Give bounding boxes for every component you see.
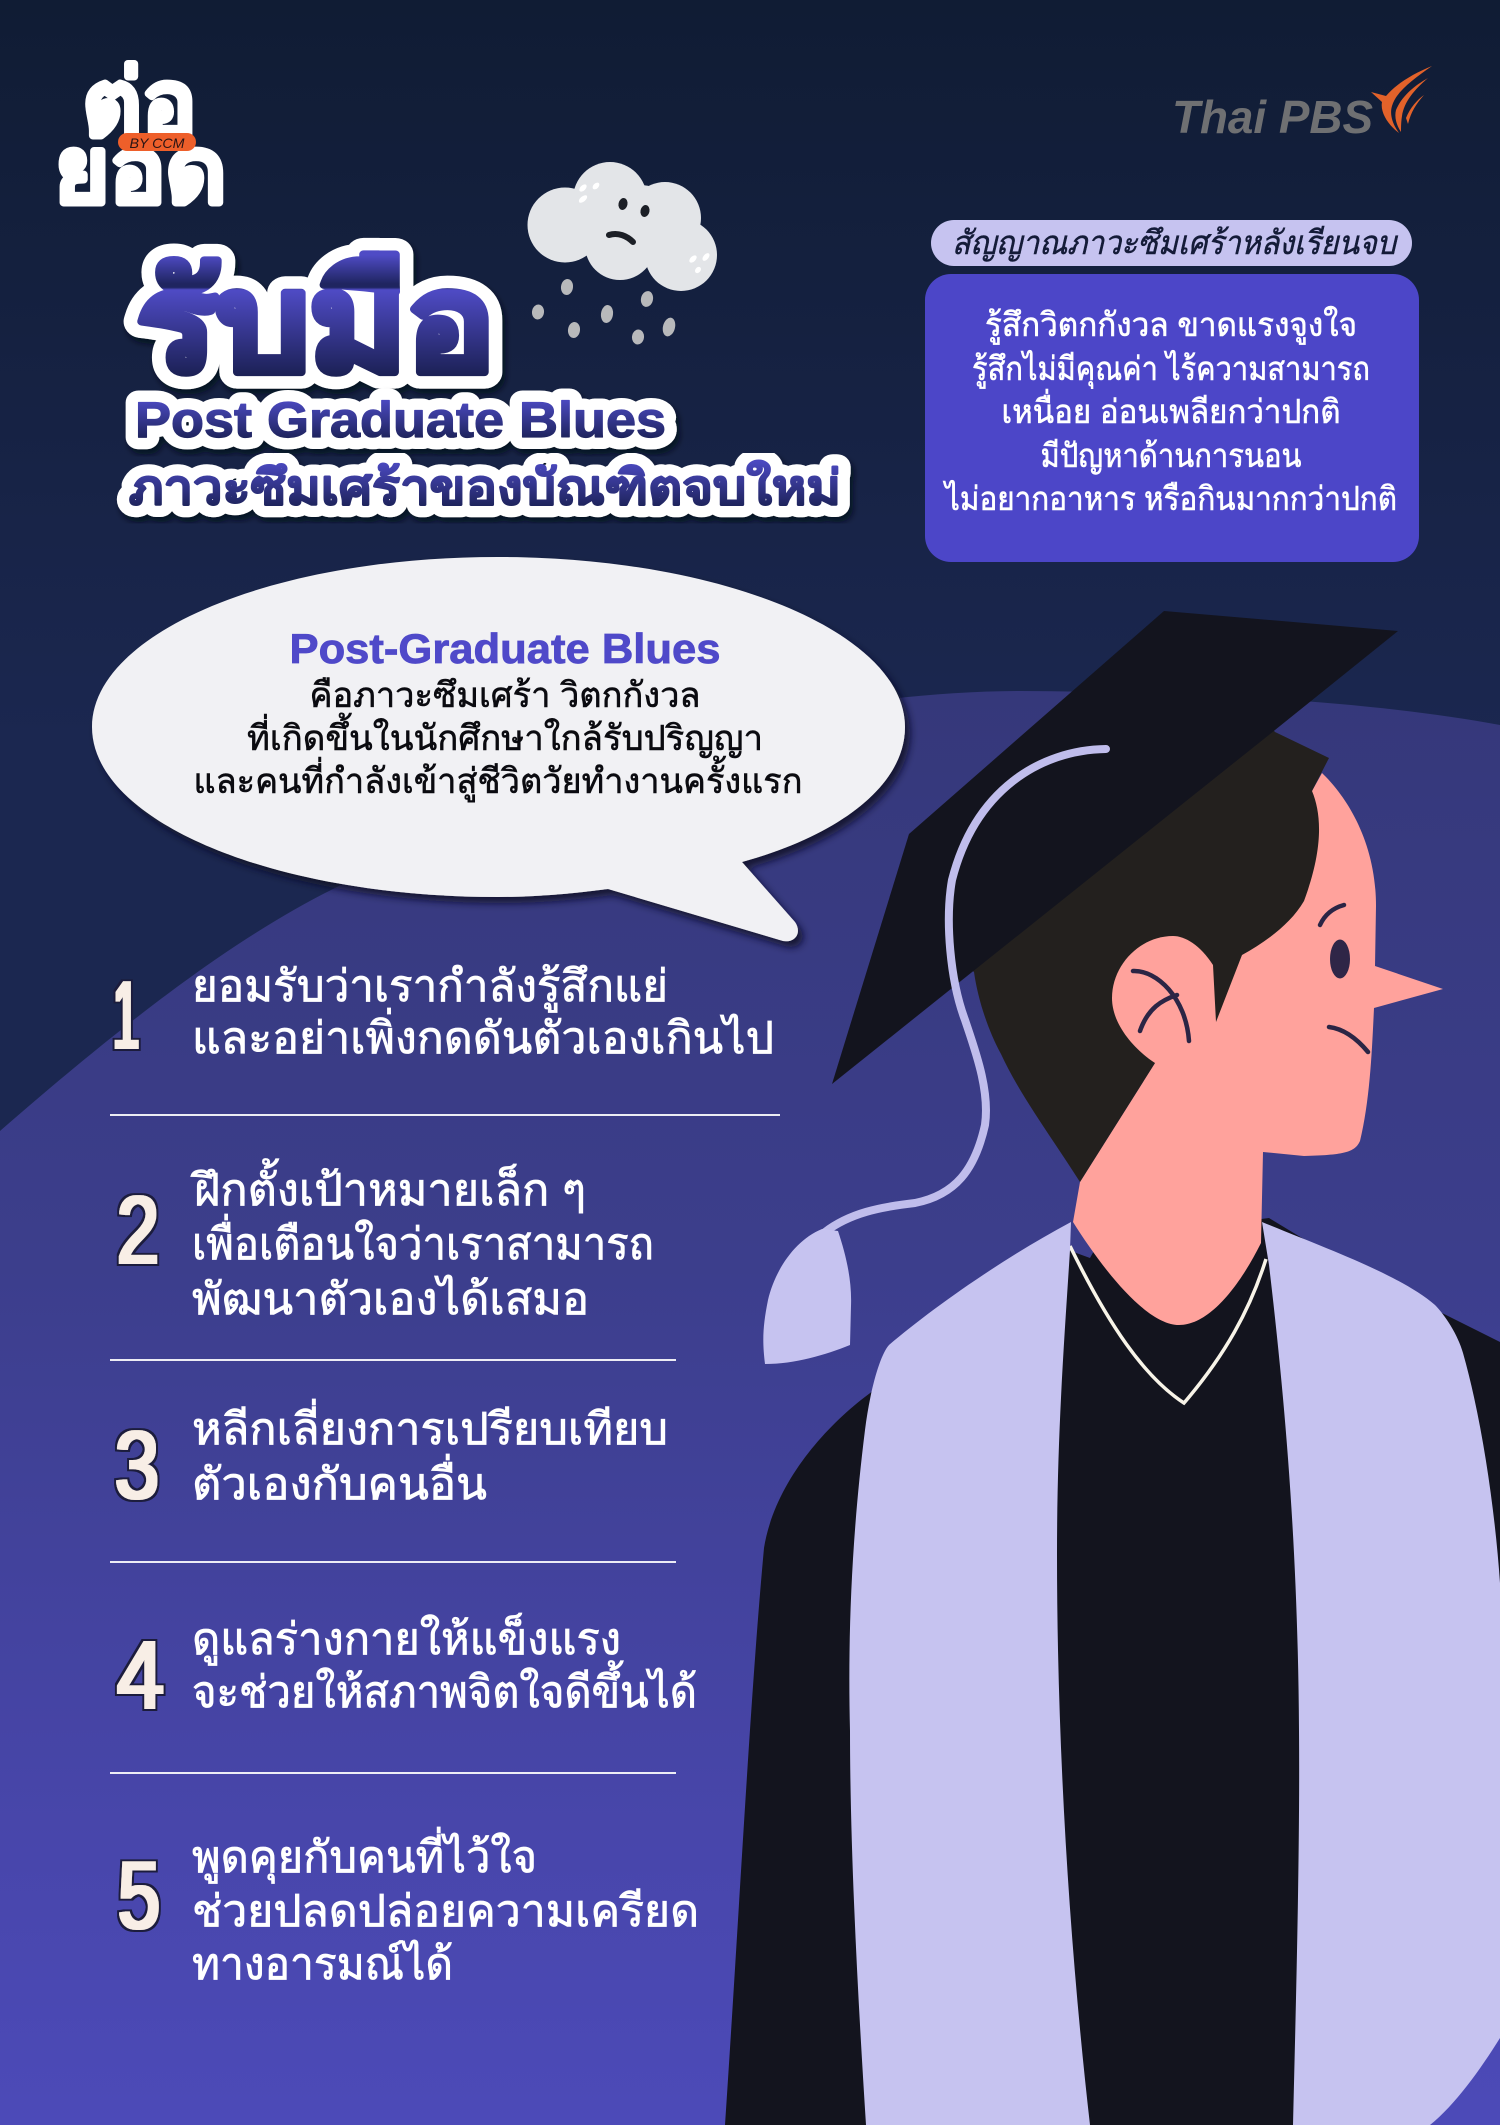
bubble text: คือภาวะซึมเศร้า วิตกกังวล [310, 676, 700, 715]
tip 4 [117, 1613, 697, 1729]
tip 4: 4 [117, 1622, 164, 1729]
tip 3 [115, 1398, 668, 1519]
graduation cap [832, 611, 1398, 1084]
subtitle outline: Thai: ภาวะซึมเศร้าของบัณฑิตจบใหม่ [129, 459, 841, 515]
panel: symptoms list: มีปัญหาด้านการนอน [1040, 437, 1302, 474]
illustration: graduate [725, 611, 1500, 2125]
tip 5: 5 [118, 1842, 160, 1949]
tip 2: เพื่อเตือนใจว่าเราสามารถ [192, 1213, 654, 1269]
tip 3: 3 [115, 1412, 159, 1519]
brow, eye and mouth [1320, 905, 1368, 1052]
title block [129, 248, 841, 515]
title outline: รับมือ: รับมือ [137, 248, 495, 399]
panel: symptoms list: ไม่อยากอาหาร หรือกินมากกว่าปกติ [942, 480, 1397, 517]
bubble text: ที่เกิดขึ้นในนักศึกษาใกล้รับปริญญา [247, 712, 763, 758]
title outline: Post Graduate Blues: Post Graduate Blues [135, 392, 666, 448]
background arc shape [0, 691, 1500, 2125]
tip 3: ตัวเองกับคนอื่น [192, 1453, 487, 1509]
tip 5 [118, 1826, 699, 1989]
panel: symptoms list: เหนื่อย อ่อนเพลียกว่าปกติ [1002, 389, 1340, 430]
tip 4: ดูแลร่างกายให้แข็งแรง [192, 1613, 621, 1666]
logo: ต่อยอด by CCM: ต่อ [82, 53, 196, 155]
panel: symptoms list: รู้สึกวิตกกังวล ขาดแรงจูงใจ [985, 306, 1357, 345]
left stole [849, 1222, 1090, 2125]
speech bubble: definition [92, 557, 905, 941]
face and neck [1073, 773, 1443, 1325]
ear lines [1133, 971, 1189, 1041]
tassel cord [825, 749, 1106, 1232]
panel: symptoms list: รู้สึกไม่มีคุณค่า ไร้ความสามารถ [972, 350, 1370, 389]
tip 2: ฝึกตั้งเป้าหมายเล็ก ๆ [190, 1158, 586, 1215]
icon: sad rain cloud [528, 162, 717, 345]
panel: symptoms heading pill: สัญญาณภาวะซึมเศร้าหลังเรียนจบ [952, 224, 1399, 262]
tip 1: ยอมรับว่าเรากำลังรู้สึกแย่ [192, 962, 668, 1013]
tip 2: 2 [117, 1177, 159, 1284]
logo: ต่อยอด by CCM: BY CCM [130, 135, 185, 151]
tip 2 [117, 1158, 654, 1324]
logo: ต่อยอด by CCM [54, 53, 226, 222]
tip 1: 1 [113, 962, 139, 1069]
subtitle: Thai: ภาวะซึมเศร้าของบัณฑิตจบใหม่ [129, 459, 841, 515]
tip 1: และอย่าเพิ่งกดดันตัวเองเกินไป [192, 1007, 774, 1063]
tip 2: พัฒนาตัวเองได้เสมอ [192, 1274, 589, 1324]
hair [960, 715, 1329, 1182]
tip 5: ช่วยปลดปล่อยความเครียด [192, 1887, 699, 1936]
right stole [1262, 1222, 1500, 2125]
logo: Thai PBS: Thai PBS [1172, 91, 1373, 143]
panel: symptoms list [925, 274, 1419, 562]
tip 4: จะช่วยให้สภาพจิตใจดีขึ้นได้ [192, 1660, 697, 1717]
logo: Thai PBS [1172, 66, 1432, 143]
necklace [1070, 1246, 1266, 1403]
tip 5: ทางอารมณ์ได้ [192, 1939, 453, 1989]
tip 3: หลีกเลี่ยงการเปรียบเทียบ [192, 1398, 668, 1454]
bubble text: และคนที่กำลังเข้าสู่ชีวิตวัยทำงานครั้งแรก [194, 755, 802, 802]
bubble heading: Post-Graduate Blues [290, 625, 720, 672]
bubble text [194, 676, 802, 802]
tip 1 [113, 962, 774, 1069]
tassel [763, 1229, 851, 1364]
title: รับมือ: รับมือ [137, 248, 495, 399]
gown [725, 1218, 1500, 2125]
tip 5: พูดคุยกับคนที่ไว้ใจ [192, 1826, 537, 1884]
logo: ต่อยอด by CCM: ยอด [54, 120, 226, 222]
ear [1112, 936, 1213, 1063]
title: Post Graduate Blues: Post Graduate Blues [135, 392, 666, 448]
